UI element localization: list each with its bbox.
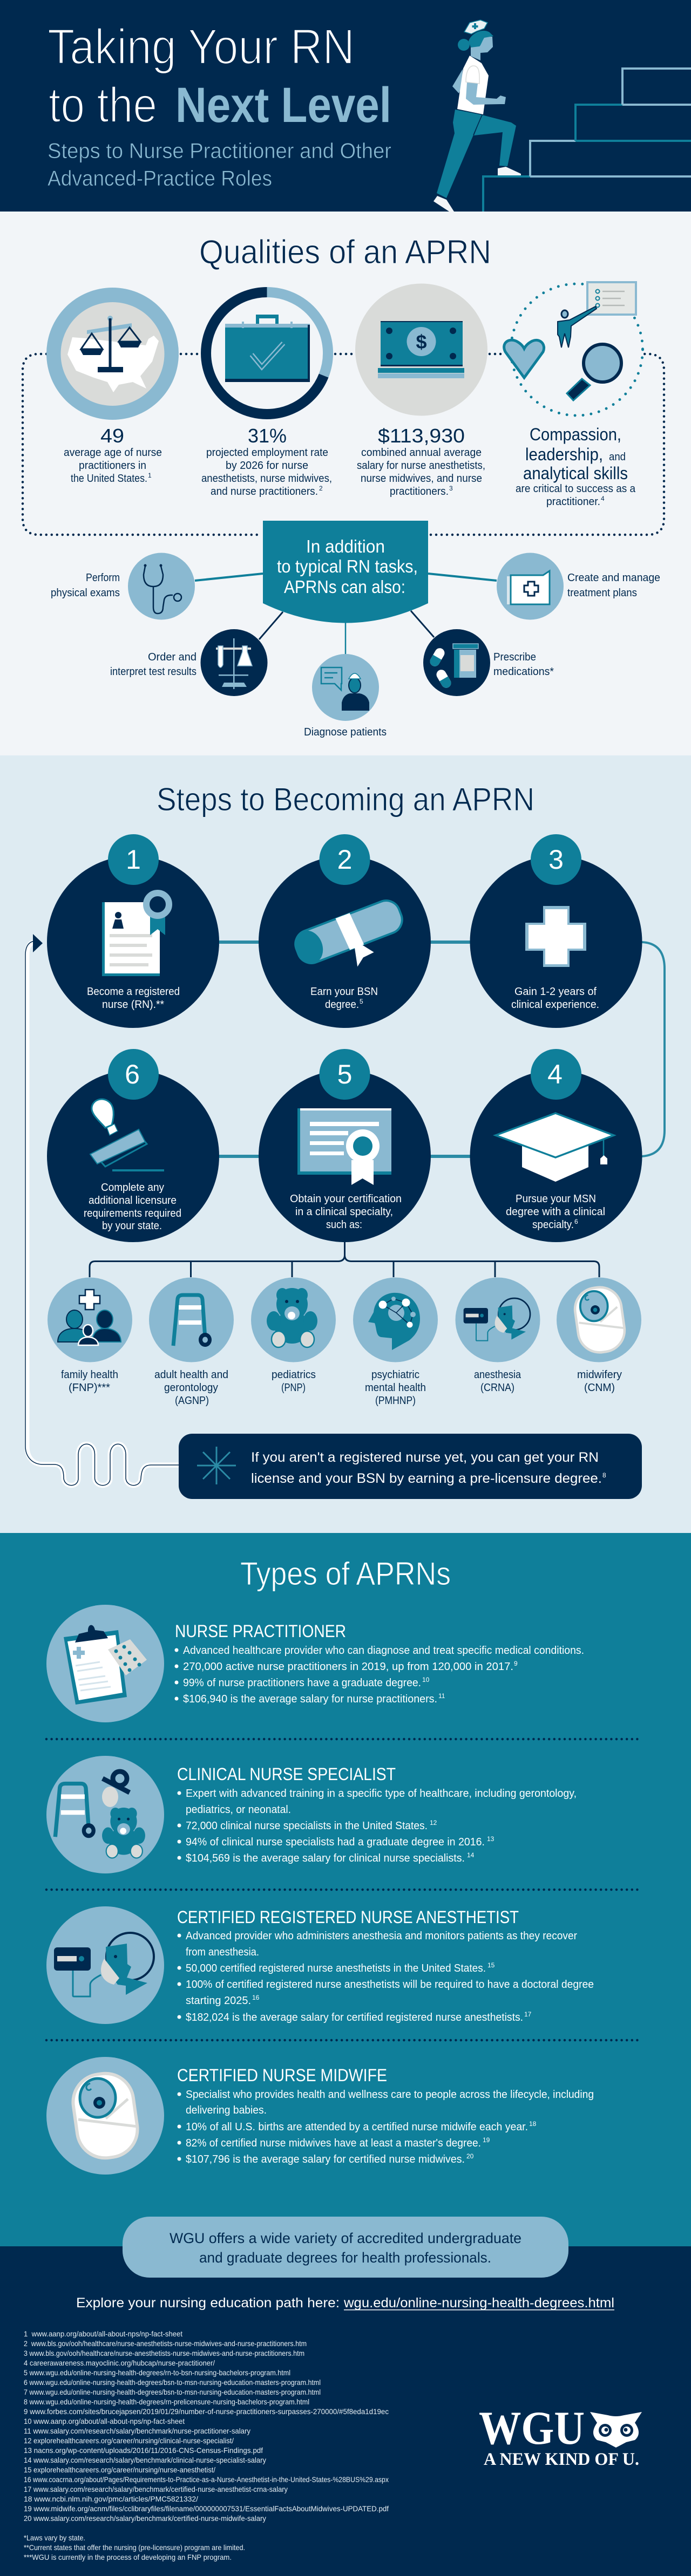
icon: walker — [149, 1278, 234, 1362]
title: Taking Your RN to the Next Level: Next Level — [175, 78, 391, 133]
task: order and interpret test results: interpret test results — [110, 666, 197, 678]
type: certified nurse midwife: Specialist who provides health and wellness care to people across the lifecycle, including — [186, 2089, 594, 2101]
stat: 31% employment rate: projected employment rate — [206, 447, 328, 459]
text: explore link: wgu.edu/online-nursing-health-degrees.html — [343, 2295, 614, 2311]
step 2: earn your BSN degree: 5 — [360, 998, 363, 1005]
type: certified registered nurse anesthetist — [46, 1906, 594, 2024]
icon: teddy bear — [251, 1278, 336, 1362]
step 5: obtain certification: 5 — [337, 1059, 352, 1089]
stat: 31% employment rate: 2 — [319, 485, 323, 492]
type: certified nurse midwife: CERTIFIED NURSE MIDWIFE — [177, 2066, 387, 2085]
text: references: 16 www.coacrna.org/about/Pages/Requirements-to-Practice-as-a-Nurse-Anesthetist-in-the-United-States-%28BUS%29.aspx — [24, 2475, 389, 2484]
step 4: pursue your MSN: degree with a clinical — [506, 1206, 605, 1218]
stat: average age 49: practitioners in — [79, 460, 146, 472]
callout: pre-licensure degree note: 8 — [602, 1471, 606, 1479]
type: nurse practitioner: 99% of nurse practitioners have a graduate degree. — [183, 1677, 421, 1689]
type: nurse practitioner: NURSE PRACTITIONER — [175, 1621, 346, 1641]
step 1: become a registered nurse: nurse (RN).** — [102, 999, 164, 1011]
icon: graduation cap — [496, 1113, 614, 1182]
step 4: pursue your MSN: 4 — [547, 1059, 563, 1089]
icon: scales over US map — [46, 288, 179, 420]
stat: 31% employment rate — [201, 292, 332, 498]
title: Taking Your RN to the Next Level: Taking Your RN — [48, 19, 355, 74]
text: references: 11 www.salary.com/research/salary/benchmark/nurse-practitioner-salary — [24, 2427, 250, 2435]
type: certified registered nurse anesthetist: 50,000 certified registered nurse anesthetists in the United States. — [186, 1962, 486, 1974]
text: references: 8 www.wgu.edu/online-nursing-health-degrees/rn-prelicensure-nursing-bachelors-program.html — [24, 2397, 309, 2406]
subtitle: Steps to Nurse Practitioner and Other — [48, 139, 391, 163]
text: footnotes — [24, 2533, 245, 2561]
task: order and interpret test results — [110, 629, 268, 696]
text: references: 18 www.ncbi.nlm.nih.gov/pmc/articles/PMC5821332/ — [24, 2495, 198, 2503]
stat: compassion, leadership, analytical skills: leadership, — [525, 445, 603, 464]
specialty: family health — [48, 1278, 132, 1394]
type: nurse practitioner: 270,000 active nurse practitioners in 2019, up from 120,000 in 2017. — [183, 1661, 513, 1673]
text: references: 1 www.aanp.org/about/all-about-nps/np-fact-sheet — [24, 2329, 182, 2338]
text: references: 15 explorehealthcareers.org/career/nursing/nurse-anesthetist/ — [24, 2465, 215, 2474]
icon: nurse climbing stairs — [433, 20, 521, 212]
step 5: obtain certification: in a clinical specialty, — [295, 1206, 393, 1218]
stat: compassion, leadership, analytical skills: 4 — [601, 495, 605, 502]
text: references: 5 www.wgu.edu/online-nursing-health-degrees/rn-to-bsn-nursing-bachelors-program.html — [24, 2368, 290, 2377]
stat: compassion, leadership, analytical skills: analytical skills — [523, 464, 628, 483]
type: clinical nurse specialist: 94% of clinical nurse specialists had a graduate degree in 2016. — [186, 1836, 485, 1848]
step 5: obtain certification: Obtain your certification — [290, 1193, 402, 1205]
type: clinical nurse specialist: pediatrics, or neonatal. — [186, 1804, 291, 1816]
specialty: anesthesia: (CRNA) — [480, 1382, 514, 1394]
text: references: 4 careerawareness.mayoclinic.org/hubcap/nurse-practitioner/ — [24, 2359, 215, 2367]
stat: $113,930 salary: practitioners. — [390, 486, 449, 498]
step 3: gain clinical experience: clinical experience. — [511, 999, 599, 1011]
subtitle — [48, 139, 391, 190]
stat: 31% employment rate: anesthetists, nurse midwives, — [201, 473, 332, 485]
type: certified nurse midwife: 82% of certified nurse midwives have at least a master's degree. — [186, 2137, 481, 2149]
arrow: step connectors — [219, 942, 665, 1156]
text: references: 13 nacns.org/wp-content/uploads/2016/11/2016-CNS-Census-Findings.pdf — [24, 2446, 263, 2455]
text: explore link — [76, 2295, 614, 2311]
specialty: psychiatric mental health — [353, 1278, 438, 1407]
icon: anesthesia machine and patient — [46, 1906, 164, 2024]
callout: in addition to typical RN tasks: In addition — [306, 536, 385, 556]
step 6: complete licensure requirements: additional licensure — [89, 1195, 177, 1207]
step 5: obtain certification — [259, 1049, 431, 1242]
callout: in addition to typical RN tasks: to typical RN tasks, — [277, 556, 418, 576]
specialty: adult health and gerontology — [149, 1278, 234, 1407]
type: certified nurse midwife — [46, 2057, 594, 2175]
step 1: become a registered nurse: 1 — [126, 844, 141, 875]
stat: 31% employment rate: and nurse practitioners. — [211, 486, 318, 498]
step 3: gain clinical experience — [470, 834, 642, 1028]
icon: briefcase in progress ring — [206, 292, 328, 414]
type: certified registered nurse anesthetist: starting 2025. — [186, 1995, 251, 2007]
step 3: gain clinical experience: Gain 1-2 years of — [514, 986, 597, 998]
callout: in addition to typical RN tasks — [263, 521, 428, 623]
arrow: pre-licensure path back to step 1 — [25, 934, 179, 1485]
specialty: psychiatric mental health: (PMHNP) — [375, 1395, 416, 1407]
step 5: obtain certification: such as: — [326, 1219, 362, 1231]
callout: WGU offers — [123, 2217, 568, 2278]
stat: compassion, leadership, analytical skills: and — [609, 451, 626, 463]
stat: $113,930 salary: combined annual average — [361, 447, 482, 459]
text: references: 2 www.bls.gov/ooh/healthcare/nurse-anesthetists-nurse-midwives-and-nurse-practitioners.htm — [24, 2339, 307, 2348]
text: footnotes: *Laws vary by state. — [24, 2533, 85, 2542]
step 6: complete licensure requirements: requirements required — [84, 1208, 181, 1219]
callout: WGU offers: and graduate degrees for health professionals. — [199, 2250, 491, 2266]
step 6: complete licensure requirements: Complete any — [101, 1182, 164, 1194]
icon: anesthesia machine and patient — [456, 1278, 540, 1362]
task: create and manage treatment plans: Create and manage — [567, 572, 660, 584]
heading: steps: Steps to Becoming an APRN — [157, 781, 534, 817]
step 4: pursue your MSN: Pursue your MSN — [516, 1193, 596, 1205]
specialty: family health: family health — [61, 1369, 118, 1381]
step 4: pursue your MSN: specialty. — [532, 1219, 574, 1231]
specialty: anesthesia: anesthesia — [474, 1369, 521, 1381]
specialty: psychiatric mental health: psychiatric — [371, 1369, 419, 1381]
type: certified registered nurse anesthetist: CERTIFIED REGISTERED NURSE ANESTHETIST — [177, 1907, 519, 1927]
stat: $113,930 salary: 3 — [449, 485, 453, 492]
icon: head with brain network — [353, 1278, 438, 1362]
specialty: pediatrics: pediatrics — [272, 1369, 316, 1381]
text: references — [24, 2329, 389, 2523]
type: certified registered nurse anesthetist: from anesthesia. — [186, 1946, 259, 1958]
icon: stethoscope — [128, 553, 195, 619]
text: references: 14 www.salary.com/research/salary/benchmark/clinical-nurse-specialist-salary — [24, 2456, 266, 2464]
icon: test tubes — [201, 629, 268, 696]
stat: 31% employment rate: by 2026 for nurse — [226, 460, 308, 472]
step 1: become a registered nurse — [47, 834, 219, 1028]
task: diagnose patients: Diagnose patients — [304, 726, 387, 738]
text: references: 19 www.midwife.org/acnm/files/cclibraryfiles/filename/000000007531/EssentialFactsAboutMidwives-UPDATED.pdf — [24, 2504, 389, 2513]
task: prescribe medications — [423, 629, 554, 696]
type: certified registered nurse anesthetist: 17 — [524, 2011, 532, 2018]
callout: in addition to typical RN tasks: APRNs can also: — [284, 577, 405, 597]
icon: clipboard and pills — [46, 1605, 164, 1722]
subtitle: Advanced-Practice Roles — [48, 167, 272, 190]
icon: pills and bottle — [423, 629, 490, 696]
icon: swaddled baby — [557, 1278, 641, 1362]
type: certified registered nurse anesthetist: 15 — [487, 1961, 495, 1969]
type: nurse practitioner: 9 — [514, 1660, 518, 1667]
task: order and interpret test results: Order and — [148, 651, 197, 663]
specialty: pediatrics: (PNP) — [281, 1382, 306, 1394]
connectors from task box — [195, 574, 497, 654]
specialty: adult health and gerontology: (AGNP) — [175, 1395, 209, 1407]
panel: types of APRNs — [0, 1533, 691, 2246]
logo: WGU, a new kind of U: A NEW KIND OF U. — [484, 2450, 639, 2469]
specialty: midwifery: midwifery — [577, 1369, 622, 1381]
text: references: 12 explorehealthcareers.org/career/nursing/clinical-nurse-specialist/ — [24, 2436, 234, 2445]
stat: $113,930 salary: nurse midwives, and nurse — [361, 473, 482, 485]
stat: average age 49: 49 — [100, 425, 124, 447]
type: certified nurse midwife: 19 — [483, 2136, 490, 2144]
text: references: 9 www.forbes.com/sites/brucejapsen/2019/01/29/number-of-nurse-practitioners-surpasses-270000/#5f8eda1d19ec — [24, 2407, 389, 2416]
type: clinical nurse specialist: $104,569 is the average salary for clinical nurse specialists. — [186, 1852, 465, 1864]
text: references: 10 www.aanp.org/about/all-about-nps/np-fact-sheet — [24, 2417, 185, 2425]
step 2: earn your BSN degree: 2 — [337, 844, 352, 875]
icon: swaddled baby — [46, 2057, 164, 2175]
type: nurse practitioner: 11 — [438, 1692, 445, 1700]
tree connector to specialties — [90, 1242, 599, 1277]
stat: average age 49: average age of nurse — [64, 447, 162, 459]
stat: average age 49 — [46, 288, 179, 485]
icon: licence document — [102, 893, 169, 976]
stat: compassion, leadership, analytical skills: Compassion, — [530, 425, 621, 444]
step 4: pursue your MSN — [470, 1049, 642, 1242]
step 2: earn your BSN degree: Earn your BSN — [310, 986, 378, 998]
specialty: midwifery: (CNM) — [584, 1382, 615, 1394]
text: footnotes: ***WGU is currently in the process of developing an FNP program. — [24, 2553, 232, 2561]
type: certified registered nurse anesthetist: Advanced provider who administers anesthesia and monitors patients as they recover — [186, 1930, 577, 1942]
stat: compassion, leadership, analytical skills: practitioner. — [546, 496, 600, 508]
callout: pre-licensure degree note — [179, 1434, 642, 1499]
stat: $113,930 salary: $113,930 — [378, 425, 465, 447]
stat: $113,930 salary — [355, 284, 487, 498]
type: certified nurse midwife: delivering babies. — [186, 2104, 267, 2116]
icon: asterisk — [197, 1447, 236, 1484]
type: certified registered nurse anesthetist: 100% of certified registered nurse anesthetists will be required to have a doctoral degree — [186, 1979, 594, 1991]
step 4: pursue your MSN: 6 — [574, 1218, 578, 1225]
specialty: adult health and gerontology: adult health and — [154, 1369, 228, 1381]
text: references: 17 www.salary.com/research/salary/benchmark/certified-nurse-anesthetist-crna-salary — [24, 2485, 288, 2493]
type: clinical nurse specialist: 12 — [430, 1819, 437, 1827]
icon: owl — [590, 2412, 642, 2448]
icon: stairs — [483, 69, 691, 212]
step 6: complete licensure requirements: by your state. — [102, 1220, 162, 1232]
panel: footer — [0, 2217, 691, 2576]
logo: WGU, a new kind of U — [479, 2402, 642, 2469]
task: diagnose patients — [304, 654, 387, 738]
panel: steps to becoming an APRN — [0, 755, 691, 1533]
icon: medical cross — [525, 906, 586, 967]
type: certified nurse midwife: 20 — [466, 2152, 474, 2160]
type: clinical nurse specialist: CLINICAL NURSE SPECIALIST — [177, 1764, 396, 1784]
icon: certificate — [297, 1108, 391, 1185]
step 3: gain clinical experience: 3 — [548, 844, 564, 875]
type: nurse practitioner: $106,940 is the average salary for nurse practitioners. — [183, 1693, 437, 1705]
type: certified registered nurse anesthetist: $182,024 is the average salary for certified registered nurse anesthetists. — [186, 2012, 523, 2023]
type: clinical nurse specialist: 13 — [487, 1835, 494, 1843]
heading: qualities: Qualities of an APRN — [199, 234, 491, 271]
type: certified nurse midwife: 18 — [529, 2120, 537, 2128]
icon: dollar bills — [355, 284, 487, 415]
icon: rubber stamp — [90, 1099, 164, 1170]
step 1: become a registered nurse: Become a registered — [87, 986, 180, 998]
panel: header — [0, 0, 691, 212]
specialty: anesthesia — [456, 1278, 540, 1394]
icon: walker, pacifier and teddy — [46, 1756, 164, 1873]
icon: dollar bills: $ — [416, 331, 427, 353]
icon: family with cross — [48, 1278, 132, 1362]
text: references: 20 www.salary.com/research/salary/benchmark/certified-nurse-midwife-salary — [24, 2514, 266, 2523]
type: clinical nurse specialist: 14 — [467, 1851, 475, 1859]
panel: qualities of an APRN — [0, 212, 691, 755]
task: create and manage treatment plans — [497, 553, 660, 619]
callout: pre-licensure degree note: license and your BSN by earning a pre-licensure degree. — [251, 1471, 602, 1486]
task: prescribe medications: medications* — [493, 666, 554, 678]
type: clinical nurse specialist — [46, 1756, 577, 1873]
type: clinical nurse specialist: Expert with advanced training in a specific type of healthcare, including gerontology, — [186, 1788, 577, 1800]
stat: average age 49: the United States. — [71, 473, 147, 485]
icon: diploma scroll — [291, 896, 413, 985]
icon: nurse with speech bubble — [312, 654, 379, 721]
icon: folder with cross — [497, 553, 564, 619]
text: references: 3 www.bls.gov/ooh/healthcare/nurse-anesthetists-nurse-midwives-and-nurse-practitioners.htm — [24, 2349, 304, 2357]
stat: compassion, leadership, analytical skills: are critical to success as a — [516, 483, 636, 495]
type: certified nurse midwife: 10% of all U.S. births are attended by a certified nurse midwife each year. — [186, 2121, 528, 2133]
text: references: 7 www.wgu.edu/online-nursing-health-degrees/bsn-to-msn-nursing-education-masters-program.html — [24, 2388, 321, 2396]
title: Taking Your RN to the Next Level: to the — [49, 78, 157, 133]
specialty: midwifery — [557, 1278, 641, 1394]
type: nurse practitioner: 10 — [422, 1676, 430, 1684]
stat: compassion, leadership, analytical skills — [504, 282, 642, 508]
title: Taking Your RN to the Next Level — [48, 19, 391, 133]
text: footnotes: **Current states that offer the nursing (pre-licensure) program are limited. — [24, 2543, 245, 2552]
task: perform physical exams: Perform — [86, 572, 120, 584]
type: certified registered nurse anesthetist: 16 — [252, 1994, 260, 2001]
task: prescribe medications: Prescribe — [493, 651, 536, 663]
callout: WGU offers: WGU offers a wide variety of accredited undergraduate — [170, 2230, 521, 2246]
specialty: adult health and gerontology: gerontology — [164, 1382, 218, 1394]
type: nurse practitioner — [46, 1605, 584, 1722]
step 2: earn your BSN degree: degree. — [325, 999, 359, 1011]
heading: types: Types of APRNs — [240, 1556, 451, 1592]
step 2: earn your BSN degree — [259, 834, 431, 1028]
text: explore link: Explore your nursing education path here: — [76, 2295, 340, 2311]
text: references: 6 www.wgu.edu/online-nursing-health-degrees/bsn-to-msn-nursing-education-masters-program.html — [24, 2378, 321, 2387]
task: perform physical exams — [51, 553, 195, 619]
logo: WGU, a new kind of U: WGU — [479, 2402, 585, 2455]
step 6: complete licensure requirements — [47, 1049, 219, 1242]
task: create and manage treatment plans: treatment plans — [567, 587, 637, 599]
stat: 31% employment rate: 31% — [248, 425, 287, 447]
stat: $113,930 salary: salary for nurse anesthetists, — [357, 460, 485, 472]
callout: pre-licensure degree note: If you aren't a registered nurse yet, you can get your RN — [251, 1450, 599, 1465]
type: clinical nurse specialist: 72,000 clinical nurse specialists in the United States. — [186, 1820, 428, 1832]
specialty: psychiatric mental health: mental health — [365, 1382, 426, 1394]
step 6: complete licensure requirements: 6 — [125, 1059, 140, 1089]
task: perform physical exams: physical exams — [51, 587, 120, 599]
type: certified nurse midwife: $107,796 is the average salary for certified nurse midwives. — [186, 2154, 465, 2165]
icon: heart, presenter and magnifier in dotted ring — [504, 282, 642, 415]
specialty: family health: (FNP)*** — [69, 1382, 110, 1394]
type: nurse practitioner: Advanced healthcare provider who can diagnose and treat specific medical conditions. — [183, 1645, 584, 1657]
specialty: pediatrics — [251, 1278, 336, 1394]
stat: average age 49: 1 — [148, 472, 152, 479]
